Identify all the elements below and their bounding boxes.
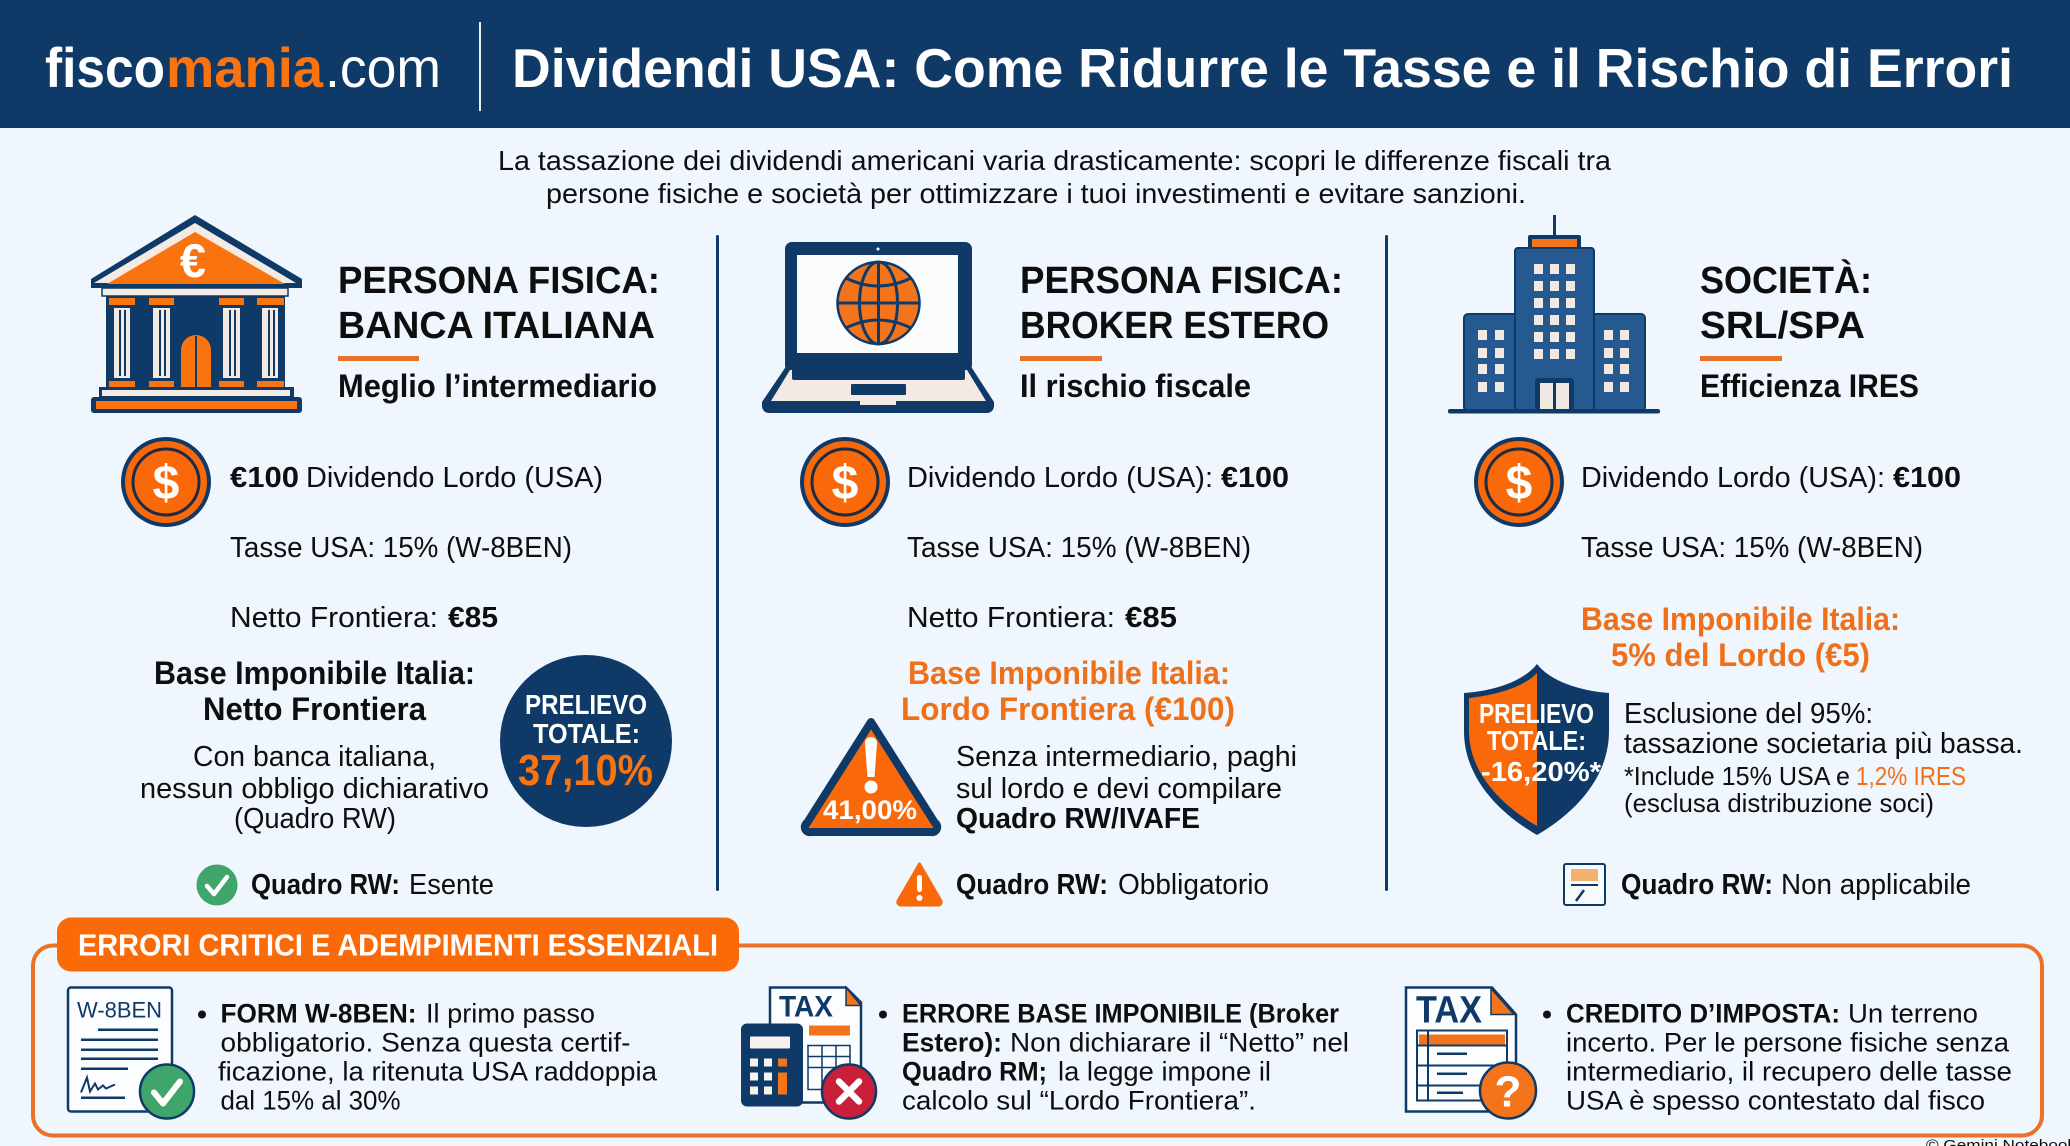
note [1624, 698, 2023, 818]
note: sul lordo e devi compilare [956, 773, 1282, 805]
heading: Efficienza IRES [1700, 368, 1919, 404]
heading: Meglio l’intermediario [338, 368, 657, 404]
icon: tax sheet with question mark [1406, 988, 1536, 1118]
status: quadro rw esente: Esente [409, 869, 494, 901]
text: form w-8ben: obbligatorio. Senza questa certif- [220, 1028, 630, 1058]
figures: Netto Frontiera: [907, 602, 1115, 634]
icon: bank [91, 215, 302, 413]
badge: total levy: PRELIEVO [525, 689, 647, 720]
section heading pill: ERRORI CRITICI E ADEMPIMENTI ESSENZIALI [78, 928, 718, 962]
taxable base [1581, 601, 1900, 673]
taxable base: 5% del Lordo (€5) [1611, 637, 1870, 673]
icon: warning triangle 41,00% [805, 722, 937, 832]
icon: dollar coin [1474, 437, 1564, 527]
status: quadro rw non applicabile [1564, 864, 1971, 905]
taxable base: Base Imponibile Italia: [908, 655, 1230, 691]
note: *Include 15% USA e [1624, 761, 1850, 791]
icon: tax sheet with question mark: ? [1495, 1068, 1521, 1116]
heading: PERSONA FISICA: [338, 260, 660, 302]
panel: persona fisica banca italiana [91, 215, 672, 906]
icon: shield with total levy: -16,20%* [1481, 756, 1601, 787]
note: Esclusione del 95%: [1624, 698, 1873, 730]
figures: Dividendo Lordo (USA): [907, 462, 1213, 494]
text: form w-8ben [198, 998, 658, 1116]
heading: SRL/SPA [1700, 305, 1865, 347]
icon: dollar coin: $ [153, 457, 180, 510]
icon: dollar coin [800, 437, 890, 527]
icon: shield with total levy: TOTALE: [1487, 725, 1586, 756]
text: credito d'imposta: incerto. Per le persone fisiche senza [1566, 1028, 2010, 1058]
logo: .com [325, 36, 441, 99]
text: errore base imponibile: ERRORE BASE IMPONIBILE (Broker [902, 998, 1339, 1028]
taxable base: Lordo Frontiera (€100) [901, 691, 1235, 727]
icon: laptop with globe [762, 242, 994, 413]
icon: office building [1448, 215, 1660, 414]
text: form w-8ben: Il primo passo [426, 998, 595, 1028]
taxable base [901, 655, 1235, 727]
figures [1581, 462, 1961, 564]
text: errore base imponibile: Quadro RM; [902, 1056, 1047, 1086]
note: Con banca italiana, [193, 741, 436, 773]
section heading pill [57, 918, 739, 972]
figures [907, 462, 1289, 634]
title: Dividendi USA: Come Ridurre le Tasse e il Rischio di Errori [512, 37, 2013, 99]
icon: dollar coin: $ [1506, 457, 1533, 510]
icon: w-8ben form [68, 988, 194, 1118]
header bar [0, 0, 2070, 128]
icon: w-8ben form: W-8BEN [77, 998, 162, 1022]
note: (Quadro RW) [234, 803, 396, 835]
figures: Tasse USA: 15% (W-8BEN) [1581, 532, 1923, 564]
figures [230, 462, 603, 634]
text: form w-8ben: FORM W-8BEN: [220, 998, 416, 1028]
note [956, 741, 1297, 835]
figures: €85 [448, 602, 498, 634]
taxable base: Base Imponibile Italia: [154, 655, 475, 691]
figures: Dividendo Lordo (USA): [1581, 462, 1885, 494]
text: errore base imponibile: Estero): [902, 1028, 1002, 1058]
figures: €100 [1893, 462, 1961, 494]
status: quadro rw non applicabile: Non applicabile [1781, 869, 1971, 901]
status: quadro rw esente [196, 864, 494, 906]
icon: shield with total levy: PRELIEVO [1479, 698, 1594, 729]
taxable base: Base Imponibile Italia: [1581, 601, 1900, 637]
subtitle: La tassazione dei dividendi americani varia drasticamente: scopri le differenze fiscali tra [498, 145, 1611, 176]
figures: €100 [1221, 462, 1289, 494]
text: credito d'imposta [1543, 998, 2012, 1116]
subtitle [498, 145, 1611, 209]
note: (esclusa distribuzione soci) [1624, 788, 1934, 818]
heading [1020, 260, 1343, 404]
icon: shield with total levy [1464, 664, 1609, 835]
heading [338, 260, 660, 404]
icon: dollar coin: $ [832, 457, 859, 510]
text: errore base imponibile [879, 998, 1349, 1116]
figures: Tasse USA: 15% (W-8BEN) [230, 532, 572, 564]
note [140, 741, 489, 835]
figures: Netto Frontiera: [230, 602, 438, 634]
text: credito d'imposta: Un terreno [1848, 998, 1978, 1028]
status: quadro rw non applicabile: Quadro RW: [1621, 869, 1773, 901]
note: Quadro RW/IVAFE [956, 803, 1200, 835]
text: form w-8ben: ficazione, la ritenuta USA raddoppia [218, 1056, 658, 1086]
icon: warning triangle 41,00%: 41,00% [823, 795, 917, 825]
icon: dollar coin [121, 437, 211, 527]
text: errore base imponibile: Non dichiarare il “Netto” nel [1010, 1028, 1349, 1058]
taxable base: Netto Frontiera [203, 691, 426, 727]
figures: Dividendo Lordo (USA) [306, 462, 603, 494]
status: quadro rw obbligatorio [898, 864, 1269, 905]
icon: tax sheet and calculator [741, 988, 876, 1118]
heading [1700, 258, 1919, 404]
heading: Il rischio fiscale [1020, 368, 1251, 404]
subtitle: persone fisiche e società per ottimizzare i tuoi investimenti e evitare sanzioni. [546, 178, 1526, 209]
heading: PERSONA FISICA: [1020, 260, 1343, 302]
note: 1,2% IRES [1856, 761, 1966, 791]
figures: €100 [230, 462, 299, 494]
text: credito d'imposta: intermediario, il recupero delle tasse [1566, 1056, 2012, 1086]
icon: tax sheet with question mark: TAX [1416, 990, 1483, 1032]
panel: errori critici [33, 918, 2042, 1136]
icon: bank: € [180, 234, 206, 287]
panel: persona fisica broker estero [762, 242, 1343, 905]
logo: fisco [45, 36, 165, 99]
text: errore base imponibile: calcolo sul “Lordo Frontiera”. [902, 1086, 1256, 1116]
figures: €85 [1125, 602, 1177, 634]
status: quadro rw esente: Quadro RW: [251, 869, 400, 901]
note: tassazione societaria più bassa. [1624, 728, 2023, 760]
logo: mania [166, 36, 324, 99]
badge: total levy [500, 655, 672, 827]
heading: BROKER ESTERO [1020, 305, 1329, 347]
figures: Tasse USA: 15% (W-8BEN) [907, 532, 1251, 564]
badge: total levy: TOTALE: [533, 718, 640, 749]
text: form w-8ben: dal 15% al 30% [220, 1086, 400, 1116]
status: quadro rw obbligatorio: Obbligatorio [1118, 869, 1269, 901]
logo [45, 36, 441, 99]
icon: tax sheet and calculator: TAX [779, 990, 833, 1024]
badge: total levy: 37,10% [518, 746, 653, 795]
note: nessun obbligo dichiarativo [140, 773, 489, 805]
note: Senza intermediario, paghi [956, 741, 1297, 773]
text: errore base imponibile: la legge impone il [1058, 1056, 1271, 1086]
text: credito d'imposta: CREDITO D’IMPOSTA: [1566, 998, 1840, 1028]
heading: BANCA ITALIANA [338, 305, 655, 347]
taxable base [154, 655, 475, 727]
heading: SOCIETÀ: [1700, 258, 1872, 302]
status: quadro rw obbligatorio: Quadro RW: [956, 869, 1108, 901]
panel: societa srl spa [1448, 215, 2023, 905]
text: credito d'imposta: USA è spesso contestato dal fisco [1566, 1086, 1985, 1116]
